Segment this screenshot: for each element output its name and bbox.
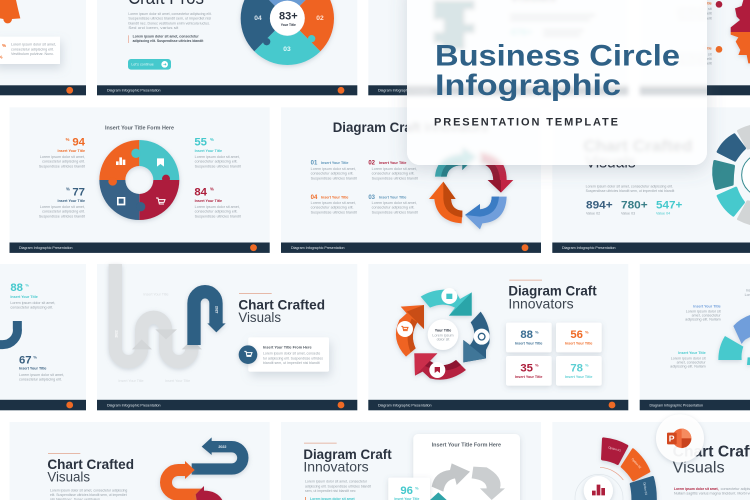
chart: puzzle circle 83+ [241,0,334,65]
slide footers: Diagram Infographic Presentation [562,246,616,250]
stat: 547+ [656,199,682,216]
arrow: orange [166,461,203,495]
text block: right slide labels: amet, consectetur [677,360,706,364]
text block: right slide labels: Insert Your Title [678,351,706,355]
stat card: 56 percent [556,323,602,352]
text block: right slide labels: amet, consectetur [692,314,721,318]
title card [400,0,714,177]
list: items 01 and 04: 04 [311,195,318,201]
chart center value: 02 [316,15,324,22]
text block: right slide labels: adipiscing nullam elit [678,16,712,20]
text block: chart crafted description [586,185,674,193]
chart center value: 03 [283,46,291,53]
icon: hidden gear [433,0,475,55]
stat card: 56 percent: % [585,329,589,334]
text block: description: Lorem ipsum dolor sit amet, consectetur [305,480,368,484]
stat: 77 percent [39,186,85,218]
list: items 02 and 03 text: Lorem ipsum dolor sit amet, [372,201,417,205]
list: items 02 and 03 text: Insert Your Title [379,161,406,165]
stat card: 88 percent: Insert Your Title [515,342,542,346]
list: items 01 and 04 [311,161,376,214]
icon: cart badge [239,345,257,364]
stat: 84 percent: % [210,187,214,192]
list: items 01 and 04: Suspendisse ultricies blandit [311,210,357,214]
stat: 67 percent: Insert Your Title [19,367,46,371]
text block: description [674,487,750,496]
heading: Chart Crafted Visuals: Visuals [586,153,636,172]
list: items 01 and 04: Insert Your Title [321,161,348,165]
stat: 780+: Value 03 [621,212,635,216]
stat: 84 percent: Lorem ipsum dolor sit amet, [195,205,240,209]
stat: 780+ [621,199,648,216]
icon: bar chart badge [584,476,613,500]
chart: four part puzzle donut [99,140,179,220]
list: items 02 and 03 text: consectetur adipiscing elit. [372,206,415,210]
stat: 84 percent: Insert Your Title [195,199,222,203]
text block: description [305,480,371,500]
list: items 02 and 03 text: Suspendisse ultricies blandit [372,210,418,214]
text block: right slide labels [670,289,750,368]
stat card: 35 percent: Insert Your Title [515,375,542,379]
stat: 84 percent: consectetur adipiscing elit. [195,210,238,214]
stat: 67 percent: 67 [19,354,32,366]
stat card: 35 percent: % [535,363,539,368]
chart center label [428,319,458,350]
text block: intro paragraph: Suspendisse ultricies blandit sem, ut imperdiet nisi [128,17,211,21]
arrow: navy 2022: 2022 [218,445,226,449]
chart: option fan: Option 02 [631,457,642,470]
stat card: 88 percent: 88 [520,329,533,341]
stat card: 96 percent: % [415,485,419,490]
stat card: 56 percent: 56 [570,329,583,341]
icon: orange puzzle fragment [0,0,20,23]
icon: orange badge [397,321,413,337]
slide footers: Diagram Infographic Presentation [107,89,161,93]
stat card: 78 percent: 78 [570,362,583,374]
stat: 88 percent: consectetur adipiscing elit. [10,306,53,310]
text block: right slide labels: adipiscing nullam elit [678,62,712,66]
quadrant: top left slides [0,0,376,220]
icon: document [117,197,125,205]
text block: hidden slide text: 476+ [510,27,533,38]
heading: Chart Crafted Visuals: Chart Crafted [583,137,693,156]
chart center label: Lorem ipsum [432,333,454,337]
stat: 94 percent: Suspendisse ultricies blandit [39,164,85,168]
stat: 894+: Value 02 [586,212,600,216]
heading: Chart Crafted Visuals: Chart Crafted [47,456,134,472]
text block: intro paragraph: Lorem ipsum dolor sit amet, consectetur [133,34,199,38]
stat card: 56 percent: Insert Your Title [565,342,592,346]
stat card: 78 percent [556,356,602,386]
list: items 02 and 03 text: Suspendisse ultricies blandit [372,176,418,180]
button: let's continue: Let's continue [131,63,154,67]
stat: 88 percent: 88 [10,282,23,294]
text block: chart crafted description: Lorem ipsum dolor sit amet, consectetur adipiscing [50,488,127,492]
segment: navy [631,477,655,500]
text block: description: adipiscing elit. Suspendisse ultricies blandit [305,484,371,488]
stat: 55 percent: 55 [194,137,207,149]
heading: Diagram Craft Innovators: Innovators [303,459,369,475]
callout: insert your title card: Lorem ipsum dolor sit amet, consecte [263,352,320,356]
heading: Chart Crafted Visuals: Visuals [238,309,281,325]
chart: circular arrows with icons [396,288,490,380]
stat: 94 percent [39,137,86,168]
arrow: teal [435,147,477,177]
heading: Diagram Craft Innovators: Diagram Craft [333,119,421,135]
text block: intro paragraph: Lorem ipsum dolor sit amet, consectetur adipiscing elit. [128,12,212,16]
list: items 01 and 04: Suspendisse ultricies blandit [311,176,357,180]
icon: teal badge [441,288,457,304]
stat: 94 percent: 94 [72,137,86,149]
stat: 55 percent: Lorem ipsum dolor sit amet, [195,155,240,159]
text block: right slide labels: adipiscing elit. Nullam [685,318,721,322]
heading: Chart Crafted Visuals [583,137,693,172]
chart: winding arrows timeline [114,264,226,383]
callout: white text card: Lorem ipsum dolor sit amet, [11,43,56,47]
list: items 01 and 04: Lorem ipsum dolor sit amet, [311,201,356,205]
icon: numbered markers [716,1,722,53]
list: items 01 and 04: 03 [368,195,376,201]
callout: white text card: consectetur adipiscing elit. [11,47,54,51]
text block: chart crafted description: elit. Suspendisse ultricies blandit sem, ut imperdiet [50,493,127,497]
arrow: navy u-turn fragment [0,321,17,345]
text block: right slide labels [677,1,712,66]
icon: crimson badge [429,362,445,378]
stat: 77 percent: % [66,187,70,192]
stat card: 78 percent: % [585,363,589,368]
stat: 84 percent: 84 [194,186,208,198]
text block: right slide labels: Title [704,1,712,5]
heading: Diagram Craft Innovators [303,443,392,475]
chart: circular arrows [429,147,513,229]
text block: description: sem, ut imperdiet nisi blandit nec [305,489,356,493]
heading: Diagram Craft Innovators [333,119,488,135]
stat: 77 percent: consectetur adipiscing elit. [42,210,85,214]
heading: Diagram Craft Innovators [508,280,597,311]
heading: Diagram Craft Innovators: Innovators [424,119,488,135]
list: items 01 and 04: 02 [368,161,376,167]
chart: option fan: Option 03 [642,482,648,496]
text block: intro paragraph: Sed orci lorem, varius sit [128,26,178,30]
stat: 84 percent [194,186,241,218]
chart center value [254,1,324,53]
list: items 01 and 04: Lorem ipsum dolor sit amet, [311,167,356,171]
text block: right slide labels: Title [704,47,712,51]
stat: 94 percent: Lorem ipsum dolor sit amet, [40,155,85,159]
heading: Chart Crafted Visuals [47,453,134,485]
chart center value: 04 [254,15,262,22]
text block: right slide labels: Lorem ipsum dolor sit [671,356,706,360]
segment: crimson [602,439,627,464]
chart center value: Your Title [281,23,296,27]
list: items 01 and 04: Insert Your Title [321,195,348,199]
title [435,40,680,102]
stat: 84 percent: Suspendisse ultricies blandit [195,214,241,218]
icon: PowerPoint badge [656,414,704,462]
text block: chart crafted description: Lorem ipsum dolor sit amet, consectetur adipiscing elit. [586,185,673,189]
stat: 894+: 894+ [586,199,613,211]
chart center label: dolor sit [437,338,449,342]
stat: 55 percent [194,137,241,168]
callout: insert your title card: tur adipiscing elit. Suspendisse ultricies [263,356,323,360]
slide footers: Diagram Infographic Presentation [650,403,703,407]
arrow: crimson [414,353,466,380]
stat: 55 percent: Suspendisse ultricies blandit [195,164,241,168]
card: puzzle arrows title panel: Insert Your Title Form Here [432,442,501,448]
text block: chart crafted description: Suspendisse ultricies blandit sem, ut imperdiet nisi blandit [586,189,674,193]
arrow: crimson [196,486,222,500]
heading: Chart Crafted Visuals [673,444,750,477]
text block: intro paragraph [128,12,212,43]
text block: right slide labels: adipiscing elit. Nullam [670,364,706,368]
icon: bookmark [157,158,164,167]
stat: 88 percent: Insert Your Title [10,295,38,299]
stat: 94 percent: consectetur adipiscing elit. [42,160,85,164]
stat: 94 percent: Insert Your Title [58,149,85,153]
chart: winding arrows timeline: Insert Your Title [118,379,144,383]
slide footers: Diagram Infographic Presentation [378,89,432,93]
arrow: blue [465,197,507,229]
stat: 547+: 547+ [656,199,682,211]
stat: 88 percent: Lorem ipsum dolor sit amet, [10,301,55,305]
chart: winding arrows timeline: 2022 [114,330,118,338]
icon: bar chart [116,157,125,165]
heading: Diagram Craft Innovators: Diagram Craft [303,446,392,462]
heading: Chart Crafted Visuals: Visuals [673,460,725,477]
text block: chart crafted description [50,488,127,500]
stat card: 78 percent: Insert Your Title [565,375,592,379]
list: items 01 and 04: 01 [311,161,318,167]
text block: right slide labels: amet, consectetur elit [677,57,712,61]
callout: insert your title card [248,337,329,372]
text block: right slide labels: Lorem ipsum dolor sit [677,52,712,56]
stat card: 35 percent: 35 [520,362,533,374]
arrow: crimson [480,152,513,193]
arrow: orange [429,182,462,223]
callout: white text card: Vestibulum pulvinar. Nunc. [11,52,54,56]
quadrant: bottom right slides [388,280,750,500]
stat: 55 percent: Insert Your Title [195,149,222,153]
list: items 02 and 03 text: consectetur adipiscing elit. [372,172,415,176]
heading: Diagram Craft Innovators: Diagram Craft [508,283,597,299]
slide footers [0,85,750,410]
heading: Diagram Craft Innovators: Innovators [508,295,574,311]
title: Business Circle [435,40,680,73]
text block: right slide labels: Insert Your Title [693,304,721,308]
slide footers: Diagram Infographic Presentation [378,403,432,407]
slide footers: Diagram Infographic Presentation [107,403,161,407]
chart: option fan: Option 01 [608,445,622,453]
stat: 67 percent: Lorem ipsum dolor sit amet, [19,373,64,377]
stat: 780+: 780+ [621,199,648,211]
title: Infographic [435,69,621,102]
stat card: 96 percent: 96 [400,485,413,497]
stat card: 88 percent [506,323,552,352]
slide footers: Diagram Infographic Presentation [291,246,345,250]
text block: right slide labels: Lorem ipsum dolor sit [677,7,712,11]
card: puzzle arrows title panel [413,434,520,500]
chart: winding arrows timeline: Insert Your Title [165,379,190,383]
heading: Chart Crafted Visuals: Chart Crafted [238,296,325,312]
list: items 01 and 04: consectetur adipiscing elit. [311,172,354,176]
heading: puzzle slide title: Insert Your Title Form Here [105,126,174,132]
text block: intro paragraph: blandit nec. Donec vestibulum enim vehicula luctus. [128,21,210,25]
list: items 01 and 04: consectetur adipiscing elit. [311,206,354,210]
icon: navy badge [474,329,490,345]
chart: S-curve arrows [166,437,243,500]
stat: 547+: Value 04 [656,212,670,216]
stat: 67 percent: consectetur adipiscing elit. [19,378,62,382]
arrow: gray heads [132,329,202,349]
quadrant: bottom left slides [0,264,392,500]
button: let's continue [128,59,171,70]
quadrant: top right slides [372,0,750,229]
callout: insert your title card: blandit sem, ut imperdiet nisi blandit [263,361,320,365]
slide footers: Diagram Infographic Presentation [19,246,73,250]
chart center label: Your Title [435,328,451,332]
stat: 88 percent: % [25,283,29,288]
callout: white text card [0,37,60,64]
stat: 77 percent: Lorem ipsum dolor sit amet, [40,205,85,209]
stat card: 88 percent: % [535,329,539,334]
text block: hidden slide text [510,0,595,38]
chart center value: 83+ [279,11,298,23]
icon: cart [156,198,165,204]
stat: 77 percent: Suspendisse ultricies blandit [39,214,85,218]
icon: PowerPoint badge: P [669,434,675,444]
text block: right slide labels: amet, consectetur elit [677,12,712,16]
list: items 02 and 03 text: Insert Your Title [379,195,406,199]
stat: 88 percent [10,282,55,310]
heading: Chart Crafted Visuals [238,293,325,325]
stat card: 96 percent [388,478,447,500]
list: items 02 and 03 text [372,161,418,214]
stat card: 35 percent [506,356,552,386]
stat: 67 percent [19,354,64,382]
arrow: teal [421,290,472,316]
stat: 894+ [586,199,613,216]
heading: Chart Crafted Visuals: Visuals [47,469,90,485]
icon: red and orange gear [731,0,750,63]
stat: 77 percent: Insert Your Title [58,199,85,203]
list: items 02 and 03 text: Lorem ipsum dolor sit amet, [372,167,417,171]
chart: option fan [575,439,655,500]
stat: 55 percent: consectetur adipiscing elit. [195,160,238,164]
arrow: navy path: 2027 [214,306,218,314]
callout: white text card: % [2,43,7,48]
text block: description: Nullam sagittis varius magna tincidunt. Morbi vel [674,492,750,496]
chart: segmented wheel [713,124,750,226]
text block: description: Lorem ipsum dolor sit amet, [674,487,719,491]
stat: 55 percent: % [210,137,214,142]
stat: 77 percent: 77 [72,186,85,198]
segment: orange [622,450,649,480]
text block: right slide labels: Lorem ipsum dolor sit [686,310,721,314]
chart: winding arrows timeline: Insert Your Title [143,292,169,296]
subtitle: PRESENTATION TEMPLATE [434,116,618,128]
arrow: gray winding path [115,264,192,362]
stat: 67 percent: % [33,355,37,360]
arrow: navy [463,312,490,362]
stat: 94 percent: % [66,137,70,142]
callout: insert your title card: Insert Your Title From Here [263,346,312,350]
chart: right slide segments [718,314,750,365]
arrow: orange [396,305,424,357]
text block: intro paragraph: adipiscing elit. Suspendisse ultricies blandit [133,39,204,43]
